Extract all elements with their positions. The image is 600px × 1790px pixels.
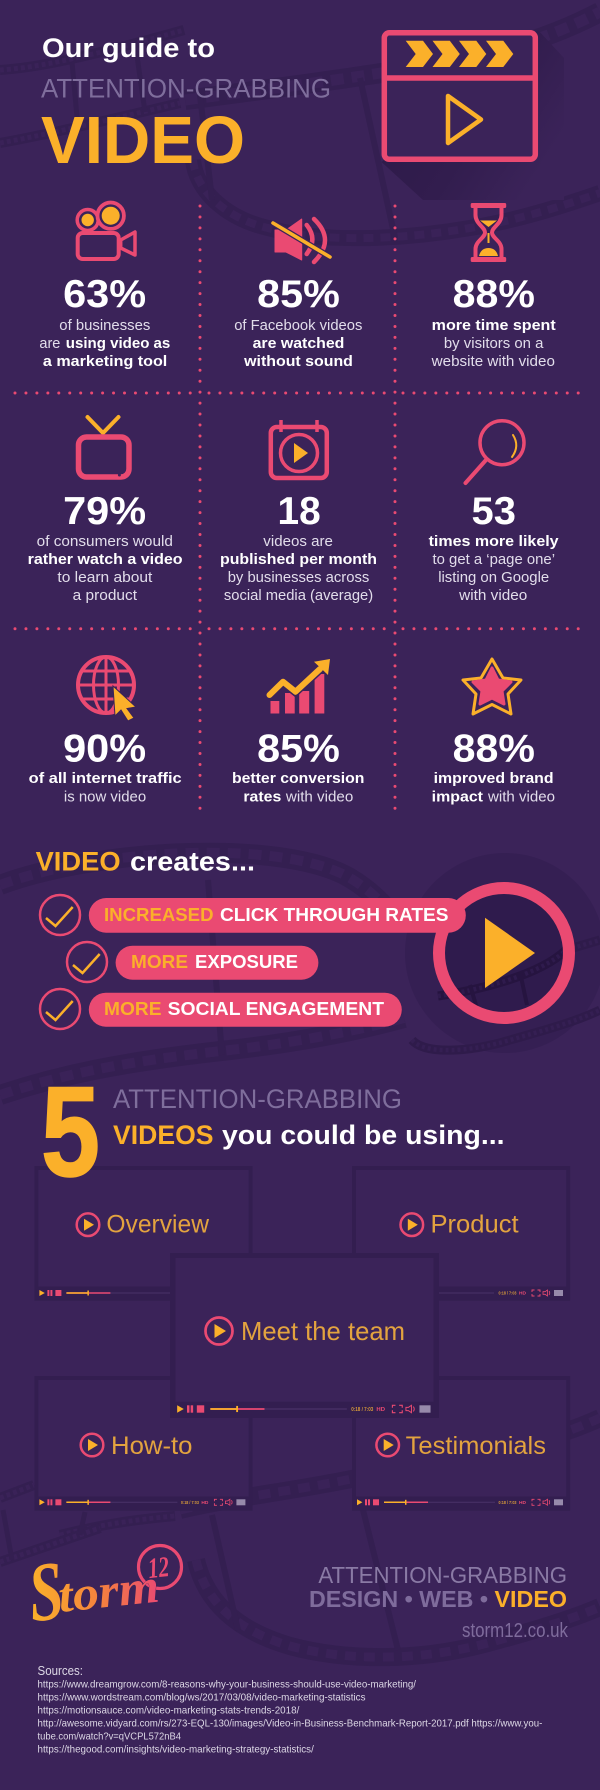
panel: 18 videos stat (220, 420, 377, 604)
logo: storm12 (24, 1544, 182, 1640)
benefit: increased click through rates: CLICK THROUGH RATES (220, 904, 448, 925)
description: published per month (220, 551, 377, 568)
description (432, 770, 555, 806)
sources: http://awesome.vidyard.com/rs/273-EQL-130/images/Video-in-Business-Benchmark-Report-2017.pdf https://www.you- (38, 1718, 543, 1730)
video card: meet the team: 0:18 / 7:03 (351, 1407, 373, 1413)
description: by businesses across (228, 569, 369, 586)
video card: product: 0:18 / 7:03 (498, 1290, 517, 1296)
description: with video (285, 789, 353, 806)
description: listing on Google (438, 569, 549, 586)
benefit: increased click through rates (40, 895, 466, 935)
video card: product: HD (519, 1290, 526, 1296)
icon: hourglass (471, 203, 506, 262)
sources (38, 1664, 543, 1756)
description: of businesses (59, 317, 150, 334)
description: better conversion (232, 770, 364, 787)
description: to get a ‘page one’ (432, 551, 555, 568)
panel: 85% stat (234, 219, 362, 370)
heading: 5 attention-grabbing videos (41, 1061, 504, 1204)
number: 88% (453, 728, 535, 771)
description: without sound (243, 353, 353, 370)
title (41, 33, 331, 178)
video card: product: Product (430, 1211, 519, 1239)
description: are (39, 335, 60, 352)
heading: video creates: creates... (130, 847, 255, 877)
icon: television (78, 417, 129, 477)
video card: how-to (34, 1376, 253, 1511)
lower film strips (0, 1418, 600, 1657)
number: 63% (63, 273, 146, 316)
description: times more likely (429, 533, 559, 550)
number: 88% (453, 273, 535, 316)
video card: meet the team: HD (376, 1407, 385, 1413)
description: of consumers would (37, 533, 173, 550)
panel: 88% brand stat (432, 659, 555, 806)
title line: our guide to: Our guide to (42, 33, 215, 63)
benefit: more social engagement (40, 989, 402, 1029)
description (429, 533, 559, 604)
description: are watched (253, 335, 344, 352)
logo: storm12: S (24, 1544, 68, 1640)
heading line two (113, 1120, 504, 1150)
sources: https://www.wordstream.com/blog/ws/2017/03/08/video-marketing-statistics (38, 1692, 366, 1704)
heading line one: ATTENTION-GRABBING (113, 1084, 402, 1114)
tagline: ATTENTION-GRABBING (318, 1562, 567, 1588)
video card: how-to: 0:18 / 7:03 (181, 1500, 199, 1505)
description: with video (458, 587, 527, 604)
number: 53 (472, 490, 516, 533)
number: 85% (257, 273, 340, 316)
benefit: more exposure: MORE (131, 951, 188, 972)
description: is now video (64, 789, 146, 806)
video card: testimonials (352, 1376, 570, 1511)
description: using video as (66, 335, 170, 352)
description: with video (487, 789, 555, 806)
description: of all internet traffic (29, 770, 182, 787)
heading line two: you could be using... (222, 1120, 504, 1150)
description: impact (432, 789, 483, 806)
description (234, 317, 362, 370)
sources: https://motionsauce.com/video-marketing-stats-trends-2018/ (38, 1705, 299, 1717)
description: by visitors on a (444, 335, 544, 352)
icon: video clapper with play button (382, 30, 564, 200)
description (220, 533, 377, 604)
description (28, 533, 183, 604)
video card: product (352, 1166, 570, 1301)
logo: storm12: torm (56, 1560, 162, 1623)
icon: calendar with play (271, 420, 327, 478)
panel: 79% stat (28, 417, 183, 604)
description: a marketing tool (43, 353, 167, 370)
tagline: VIDEO (494, 1586, 567, 1612)
number: 85% (257, 728, 340, 771)
sources: https://thegood.com/insights/video-marketing-strategy-statistics/ (38, 1744, 314, 1756)
icon: large play button ring (438, 888, 569, 1018)
icon: muted speaker (273, 219, 330, 262)
video card: how-to: HD (201, 1500, 208, 1505)
icon: video camera (77, 202, 135, 259)
film strips around play button (412, 940, 600, 1050)
number: 18 (278, 490, 321, 533)
video card: how-to: How-to (111, 1432, 193, 1460)
heading: video creates (36, 847, 255, 877)
description (29, 770, 182, 806)
logo: storm12: 12 (146, 1551, 171, 1585)
panel: 88% more time stat (431, 203, 556, 370)
numeral 5: 5 (41, 1061, 100, 1204)
title line: video: VIDEO (41, 103, 245, 178)
video card: testimonials: 0:18 / 7:03 (498, 1500, 517, 1505)
panel: 53 times stat (429, 421, 559, 604)
video card: overview (34, 1166, 253, 1301)
video card: testimonials: Testimonials (406, 1432, 546, 1460)
number: 90% (63, 728, 146, 771)
dotted grid dividers (15, 206, 581, 810)
benefit: more social engagement: MORE (104, 998, 162, 1019)
number: 79% (63, 490, 146, 533)
heading line two: VIDEOS (113, 1120, 214, 1150)
icon: globe with cursor (78, 657, 136, 721)
video card: testimonials: HD (519, 1500, 526, 1505)
background film strips (0, 12, 600, 1095)
panel: 90% stat (29, 657, 182, 806)
icon: magnifying glass (466, 421, 524, 483)
video card: meet the team (170, 1253, 439, 1418)
benefit: more exposure: EXPOSURE (195, 951, 298, 972)
description (232, 770, 364, 806)
description: website with video (431, 353, 555, 370)
benefit: more social engagement: SOCIAL ENGAGEMENT (168, 998, 385, 1019)
description: rates (243, 789, 281, 806)
description (431, 317, 556, 370)
description: a product (73, 587, 138, 604)
description: rather watch a video (28, 551, 183, 568)
video card: meet the team: Meet the team (241, 1316, 405, 1346)
title line: attention-grabbing: ATTENTION-GRABBING (41, 74, 331, 104)
tagline: DESIGN • WEB • (309, 1586, 488, 1612)
description: to learn about (57, 569, 153, 586)
icon: star (463, 659, 521, 714)
description: videos are (263, 533, 333, 550)
icon: rising bar chart (270, 659, 330, 714)
description: social media (average) (224, 587, 373, 604)
panel: 63% stat (39, 202, 170, 370)
heading: video creates: VIDEO (36, 847, 121, 877)
benefit: increased click through rates: INCREASED (104, 904, 214, 925)
tagline (309, 1562, 569, 1642)
description (39, 317, 170, 370)
video card: overview: Overview (106, 1211, 210, 1239)
tagline: storm12.co.uk (462, 1620, 569, 1642)
description: of Facebook videos (234, 317, 362, 334)
description: more time spent (432, 317, 556, 334)
sources: tube.com/watch?v=qVCPL572nB4 (38, 1731, 181, 1743)
description: improved brand (434, 770, 554, 787)
benefit: more exposure (67, 942, 318, 982)
panel: 85% conversion stat (232, 659, 364, 806)
sources: https://www.dreamgrow.com/8-reasons-why-your-business-should-use-video-marketing/ (38, 1679, 416, 1691)
sources: Sources: (38, 1664, 83, 1678)
